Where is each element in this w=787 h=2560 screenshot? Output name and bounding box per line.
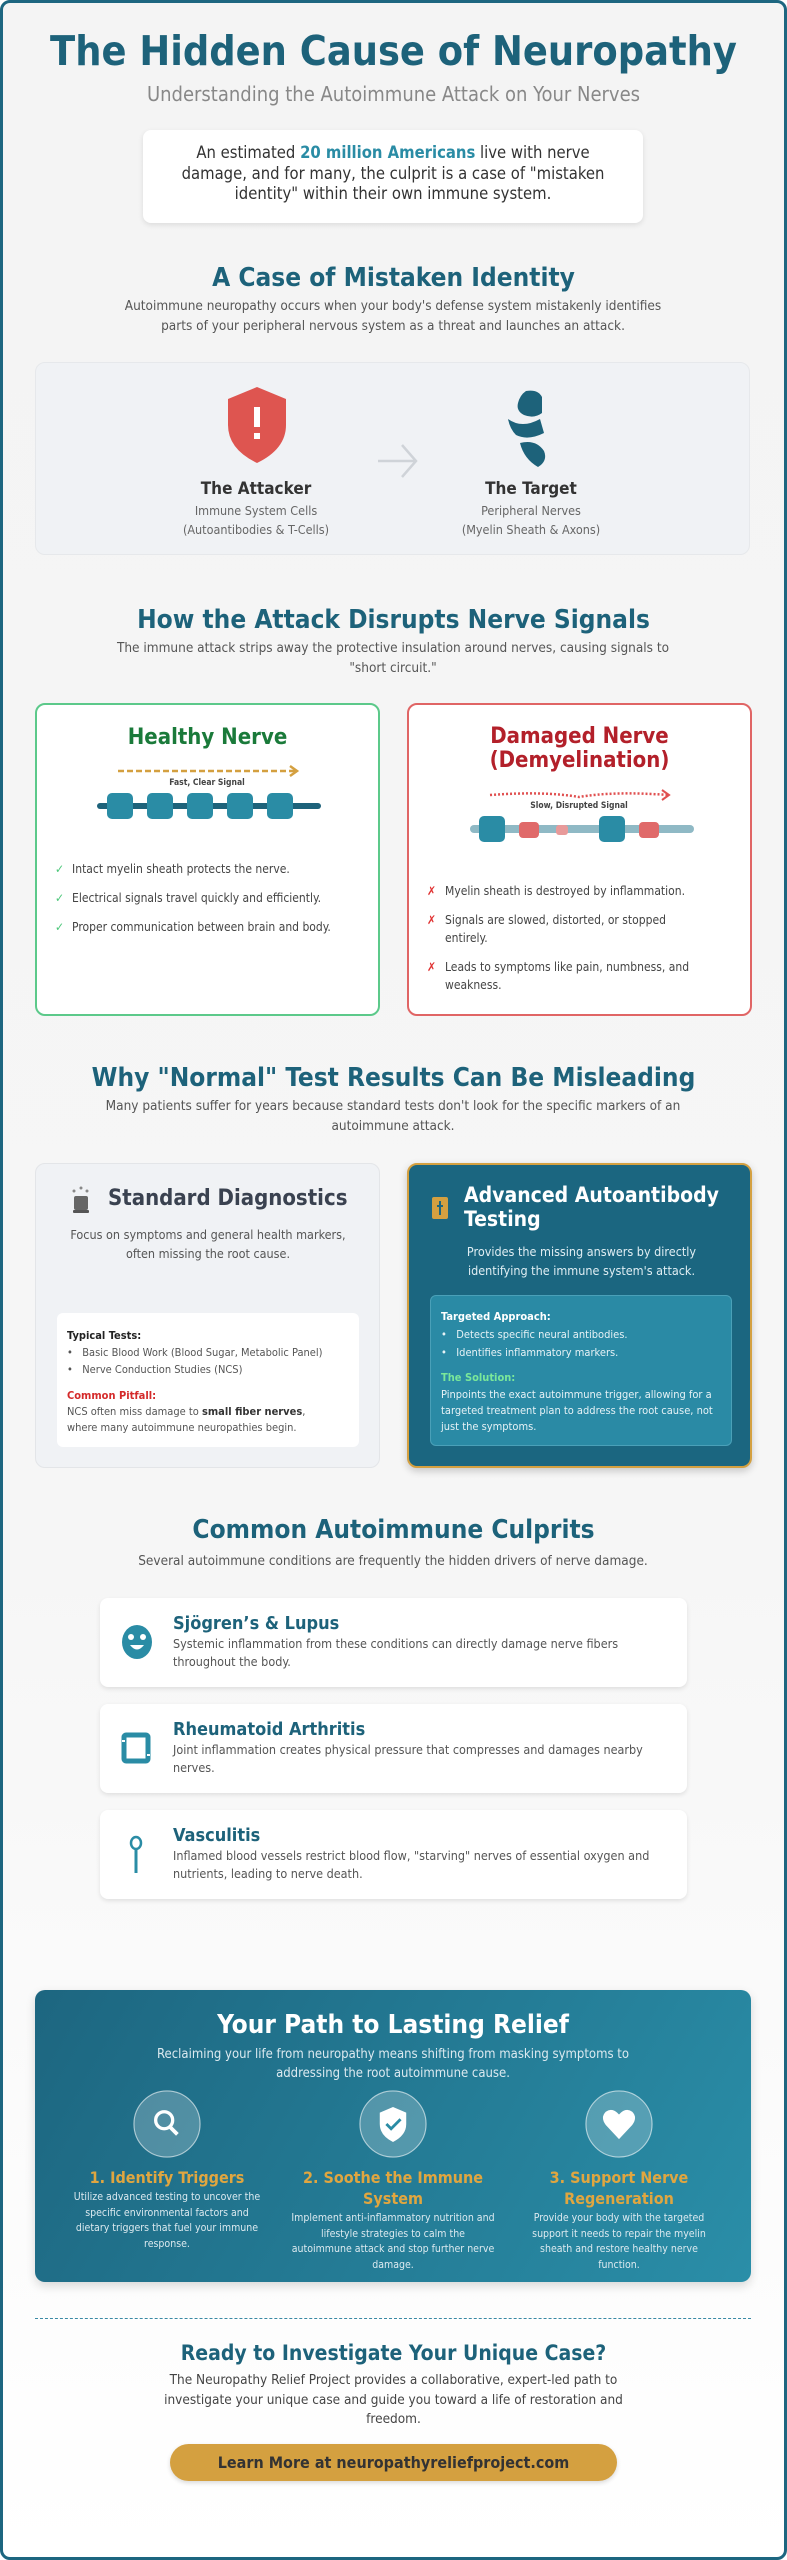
step 1: Utilize advanced testing to uncover the specific environmental factors and dietary triggers that fuel your immune response.	[74, 2191, 260, 2250]
step 1	[74, 2090, 260, 2250]
label: target: Peripheral Nerves	[481, 503, 581, 518]
list: damaged facts: Myelin sheath is destroyed by inflammation.	[445, 884, 685, 898]
icon: flask	[72, 1186, 89, 1213]
label: attacker: Immune System Cells	[195, 503, 317, 518]
label: target	[462, 479, 600, 537]
box: typical tests: NCS often miss damage to small fiber nerves, where many autoimmune neuropathies begin.	[67, 1405, 305, 1434]
list: healthy facts: ✓ Electrical signals travel quickly and efficiently.	[55, 891, 321, 905]
title: The Hidden Cause of Neuropathy	[50, 27, 737, 75]
card: vasculitis	[100, 1810, 687, 1899]
box: typical tests: Typical Tests:	[67, 1329, 141, 1342]
box: typical tests: • Nerve Conduction Studies (NCS)	[67, 1363, 242, 1376]
list: damaged facts	[427, 884, 689, 992]
icon: nerve target	[508, 390, 546, 467]
panel: path to relief	[35, 1990, 751, 2282]
panel: healthy nerve	[35, 703, 380, 1016]
heading: misleading tests: Why "Normal" Test Results Can Be Misleading	[92, 1063, 695, 1093]
panel: attacker vs target	[35, 362, 750, 555]
text: relief description: Reclaiming your life from neuropathy means shifting from masking symptoms to addressing the root autoimmune cause.	[157, 2047, 629, 2081]
text: arthritis: Rheumatoid Arthritis	[173, 1719, 365, 1740]
box: typical tests	[57, 1313, 359, 1447]
list: damaged facts: ✗	[427, 884, 436, 898]
card: rheumatoid arthritis	[100, 1704, 687, 1793]
diagram: damaged nerve	[470, 789, 694, 842]
panel: standard diagnostics	[35, 1163, 380, 1468]
panel: damaged nerve	[407, 703, 752, 1016]
box: typical tests: • Basic Blood Work (Blood Sugar, Metabolic Panel)	[67, 1346, 323, 1359]
step 3	[532, 2090, 706, 2270]
card: sjogren lupus	[100, 1598, 687, 1687]
heading: standard: Standard Diagnostics	[108, 1186, 347, 1211]
intro callout	[143, 130, 643, 223]
text: advanced description: Provides the missing answers by directly identifying the immune system's attack.	[467, 1244, 696, 1278]
icon: joint frame	[122, 1732, 150, 1764]
text: closing: The Neuropathy Relief Project provides a collaborative, expert-led path to investigate your unique case and guide you toward a life of restoration and freedom.	[164, 2372, 623, 2427]
step 3: Provide your body with the targeted support it needs to repair the myelin sheath and restore healthy nerve function.	[532, 2212, 706, 2270]
box: targeted approach: The Solution:	[441, 1371, 515, 1384]
box: targeted approach: Pinpoints the exact autoimmune trigger, allowing for a targeted treatment plan to address the root cause, not just the symptoms.	[441, 1388, 713, 1433]
icon: shield	[228, 387, 286, 463]
diagram: healthy nerve	[97, 765, 321, 819]
text: arthritis	[172, 1719, 643, 1775]
list: damaged facts: ✗	[427, 913, 436, 927]
list: healthy facts: ✓ Intact myelin sheath protects the nerve.	[55, 862, 290, 876]
panel: advanced testing	[407, 1163, 752, 1468]
label: target: The Target	[485, 479, 577, 499]
step 1: 1. Identify Triggers	[90, 2168, 244, 2187]
text: sjogren: Sjögren’s & Lupus	[173, 1613, 339, 1634]
icon: test tube	[432, 1197, 448, 1219]
heading: attack disrupts: How the Attack Disrupts Nerve Signals	[137, 605, 650, 635]
list: healthy facts	[55, 862, 331, 934]
label: attacker	[183, 479, 329, 537]
step 3: 3. Support Nerve Regeneration	[550, 2168, 688, 2208]
label: attacker: The Attacker	[201, 479, 311, 499]
arrow	[378, 444, 418, 478]
text: standard description: Focus on symptoms and general health markers, often missing the root cause.	[70, 1227, 346, 1261]
box: targeted approach: • Identifies inflammatory markers.	[441, 1346, 618, 1359]
icon: vessel	[130, 1836, 142, 1873]
heading: damaged: (Demyelination)	[490, 748, 669, 773]
step 2: Implement anti-inflammatory nutrition and lifestyle strategies to calm the autoimmune attack and stop further nerve damage.	[291, 2212, 495, 2270]
subtitle: Understanding the Autoimmune Attack on Your Nerves	[147, 82, 640, 106]
text: vasculitis: Vasculitis	[173, 1825, 260, 1846]
label: target: (Myelin Sheath & Axons)	[462, 522, 600, 537]
diagram: healthy nerve: Fast, Clear Signal	[169, 778, 245, 788]
heading: relief: Your Path to Lasting Relief	[217, 2010, 569, 2040]
list: healthy facts: ✓ Proper communication between brain and body.	[55, 920, 331, 934]
list: damaged facts: Leads to symptoms like pain, numbness, and weakness.	[445, 960, 689, 992]
button: learn more	[170, 2444, 617, 2481]
heading: mistaken identity: A Case of Mistaken Identity	[212, 263, 575, 293]
box: typical tests: Common Pitfall:	[67, 1389, 156, 1402]
text: vasculitis: Inflamed blood vessels restrict blood flow, "starving" nerves of essential oxygen and nutrients, leading to nerve death.	[173, 1848, 649, 1881]
heading: healthy: Healthy Nerve	[128, 725, 287, 750]
icon: face	[122, 1625, 152, 1659]
description: misleading: Many patients suffer for years because standard tests don't look for the specific markers of an autoimmune attack.	[106, 1098, 680, 1134]
description: mistaken identity: Autoimmune neuropathy occurs when your body's defense system mistakenly identifies parts of your peripheral nervous system as a threat and launches an attack.	[125, 298, 661, 334]
text: sjogren: Systemic inflammation from these conditions can directly damage nerve fibers throughout the body.	[173, 1636, 618, 1669]
text: vasculitis	[173, 1825, 649, 1881]
box: targeted approach: • Detects specific neural antibodies.	[441, 1328, 628, 1341]
step 2	[291, 2090, 495, 2270]
label: attacker: (Autoantibodies & T-Cells)	[183, 522, 329, 537]
box: targeted approach	[430, 1295, 732, 1446]
list: damaged facts: Signals are slowed, distorted, or stopped entirely.	[445, 913, 666, 945]
description: attack: The immune attack strips away the protective insulation around nerves, causing signals to "short circuit."	[117, 640, 669, 676]
heading: damaged	[490, 724, 669, 773]
icon: magnifier	[133, 2090, 201, 2158]
diagram: damaged nerve: Slow, Disrupted Signal	[530, 801, 628, 811]
heading: culprits: Common Autoimmune Culprits	[192, 1515, 595, 1545]
step 2: 2. Soothe the Immune System	[303, 2168, 483, 2208]
description: culprits: Several autoimmune conditions are frequently the hidden drivers of nerve damage.	[138, 1553, 648, 1569]
text: arthritis: Joint inflammation creates physical pressure that compresses and damages nearby nerves.	[173, 1742, 643, 1775]
icon: shield check	[359, 2090, 427, 2158]
heading: damaged: Damaged Nerve	[490, 724, 669, 749]
intro callout: An estimated 20 million Americans live with nerve damage, and for many, the culprit is a case of "mistaken identity" within their own immune system.	[182, 143, 604, 203]
list: damaged facts: ✗	[427, 960, 436, 974]
icon: heart	[585, 2090, 653, 2158]
heading: ready: Ready to Investigate Your Unique Case?	[181, 2341, 606, 2365]
box: targeted approach: Targeted Approach:	[441, 1310, 551, 1323]
text: sjogren	[173, 1613, 618, 1669]
heading: advanced: Advanced Autoantibody Testing	[464, 1183, 719, 1231]
button: learn more: Learn More at neuropathyreliefproject.com	[218, 2453, 569, 2472]
